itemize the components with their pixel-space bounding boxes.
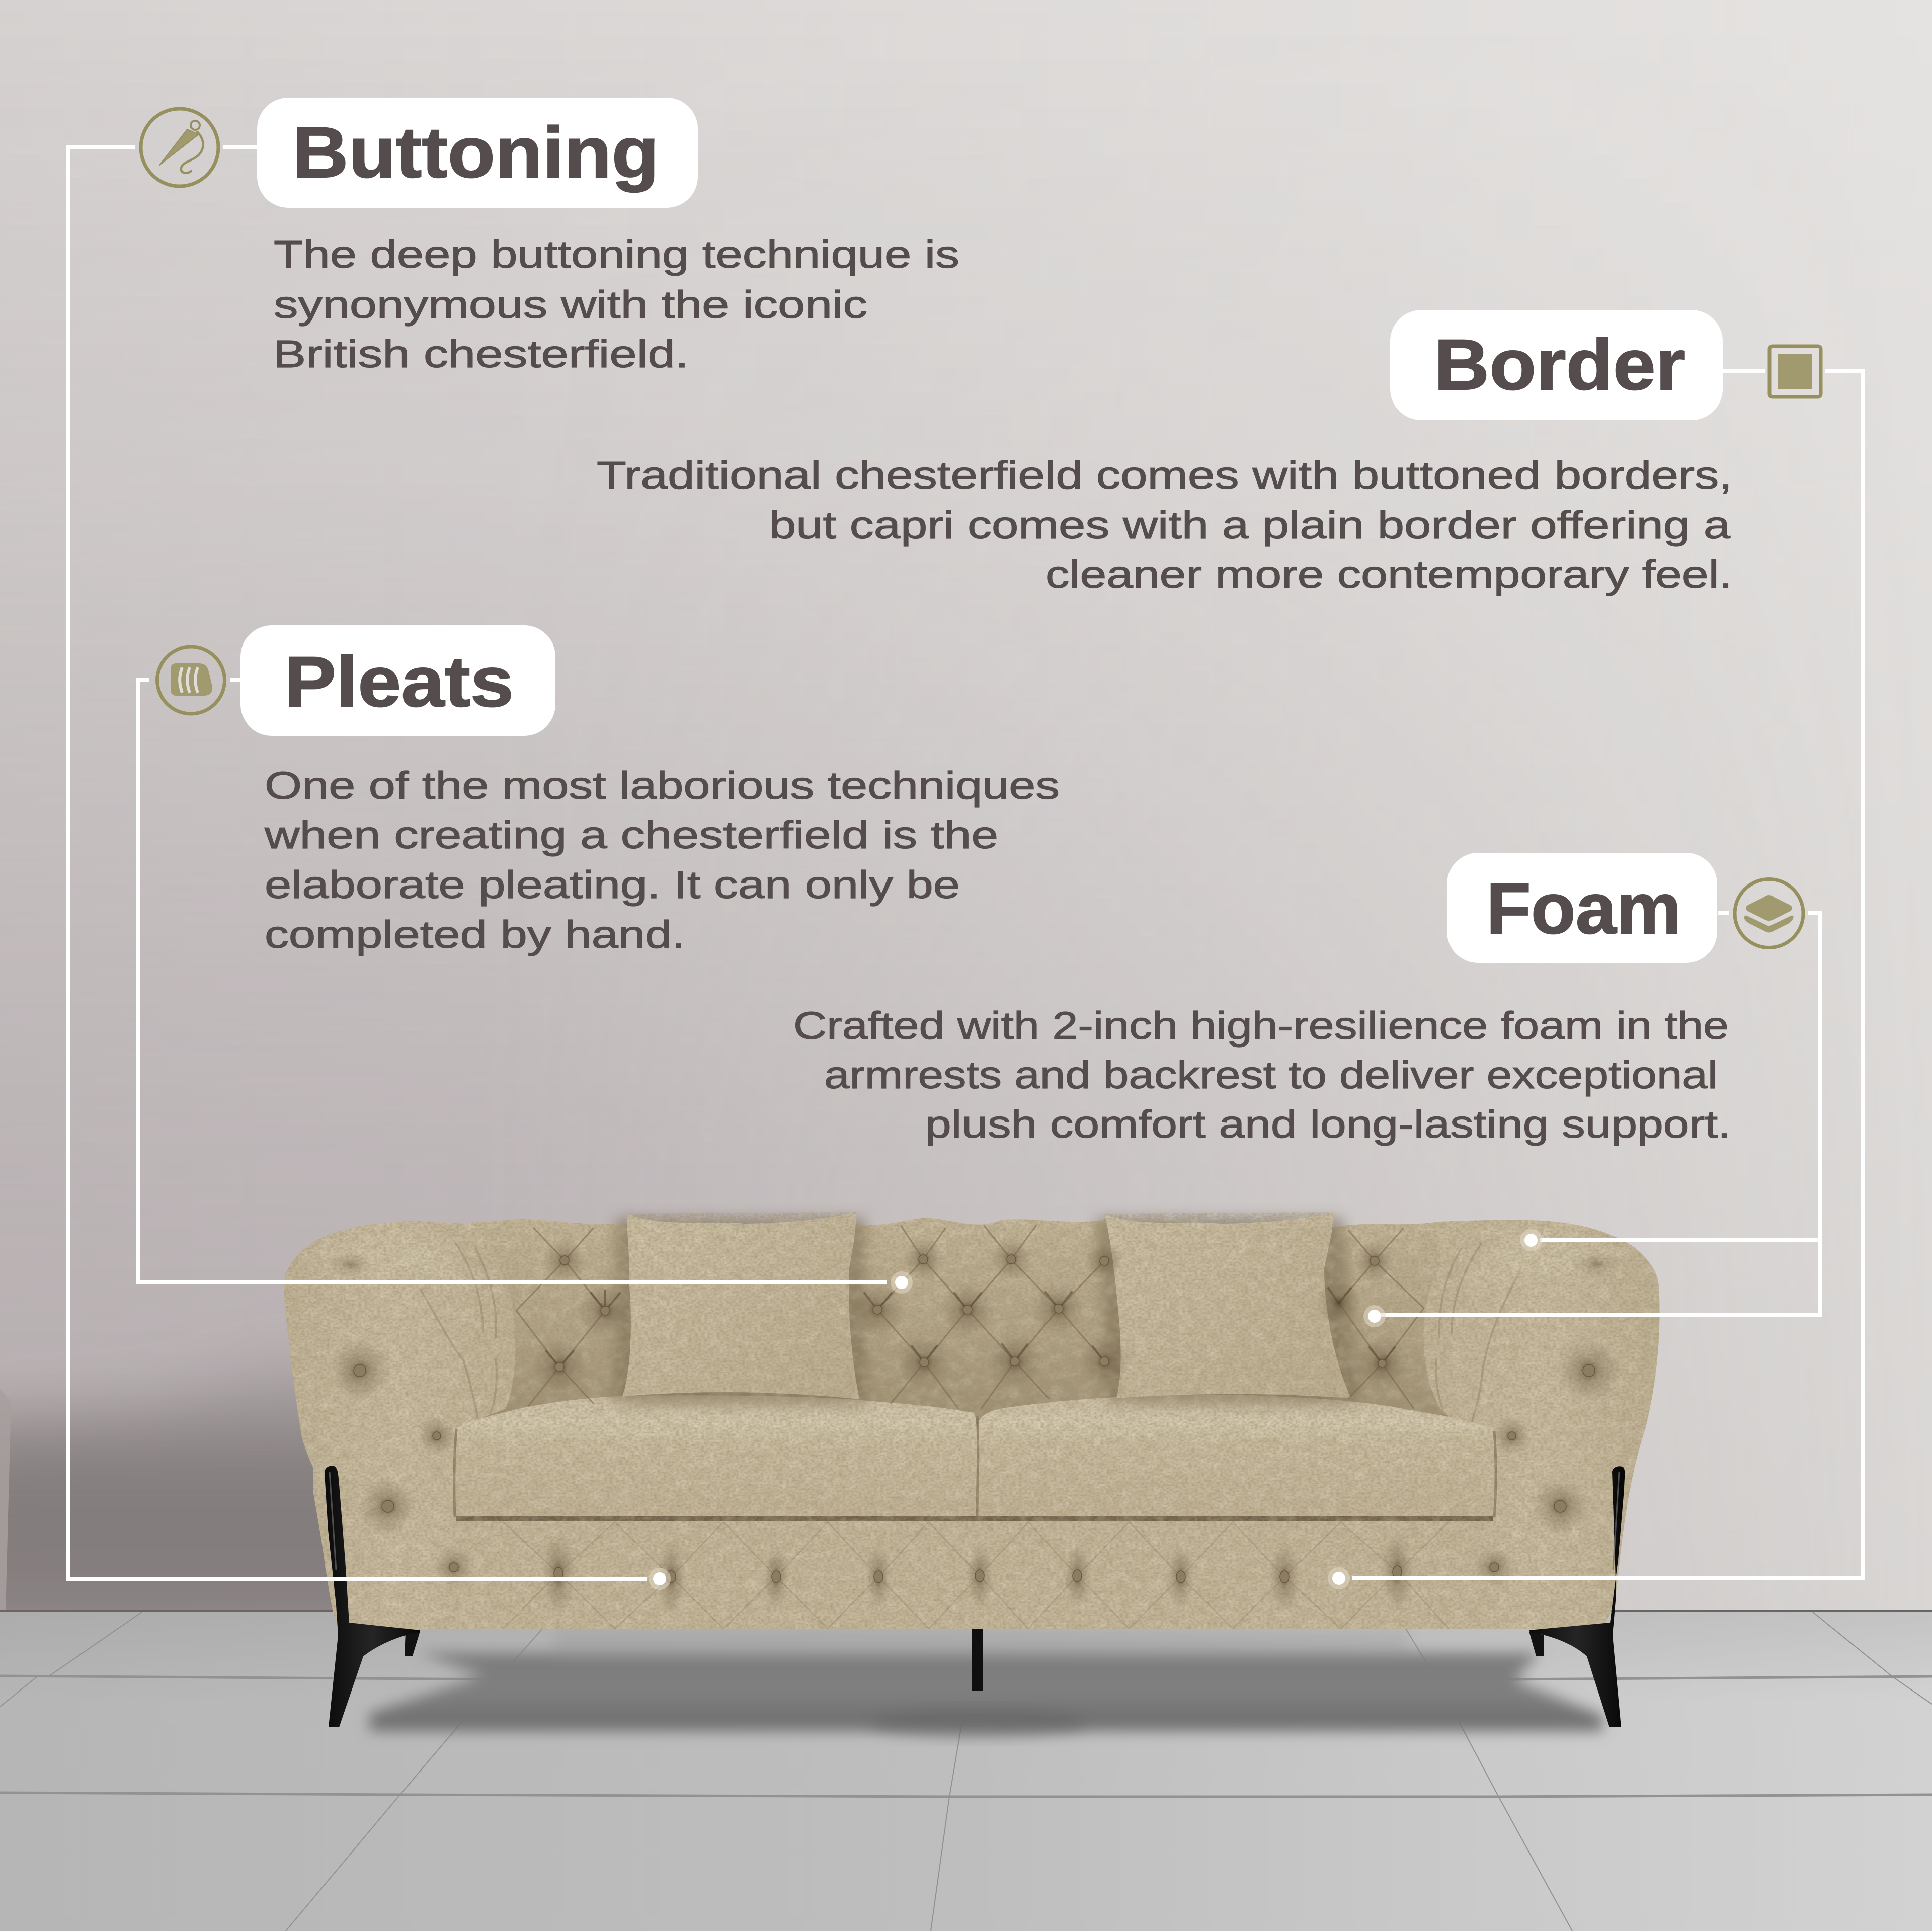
text: Buttoning description: The deep buttoning technique is bbox=[274, 233, 959, 276]
left arm bbox=[284, 1221, 515, 1629]
icon: needle and thread bbox=[141, 109, 218, 186]
heading: Foam bbox=[1447, 853, 1717, 963]
text: Border description: cleaner more contemporary feel. bbox=[1045, 553, 1732, 596]
right front leg bbox=[1529, 1466, 1625, 1727]
text: Pleats description: elaborate pleating. It can only be bbox=[265, 863, 960, 907]
text: Buttoning description bbox=[273, 233, 959, 376]
left seat cushion bbox=[454, 1395, 977, 1517]
right seat cushion bbox=[978, 1395, 1495, 1517]
text: Border description: but capri comes with a plain border offering a bbox=[769, 504, 1730, 547]
icon: border square bbox=[1769, 346, 1821, 397]
text: Border description bbox=[597, 454, 1732, 596]
left pillow bbox=[622, 1212, 859, 1399]
lower front rail bbox=[454, 1517, 1495, 1629]
heading: Pleats bbox=[240, 625, 555, 736]
icon: pleats bbox=[157, 647, 224, 714]
heading: Border bbox=[1390, 310, 1723, 420]
tuft stitching bbox=[516, 1225, 1424, 1409]
floor tiles bbox=[0, 1611, 1932, 1931]
text: Pleats description bbox=[264, 764, 1060, 956]
fabric texture bbox=[277, 1208, 1670, 1635]
cushion edges bbox=[454, 1416, 1496, 1517]
heading: Buttoning: Buttoning bbox=[292, 113, 659, 193]
right arm bbox=[1424, 1221, 1660, 1629]
right pillow bbox=[1104, 1212, 1351, 1398]
heading: Pleats: Pleats bbox=[284, 642, 514, 722]
heading: Border: Border bbox=[1434, 325, 1685, 405]
arm roll folds bbox=[420, 1243, 1519, 1424]
sofa body silhouette bbox=[284, 1218, 1660, 1629]
heading: Buttoning bbox=[257, 98, 698, 208]
back legs and centre leg bbox=[405, 1625, 1544, 1691]
text: Foam description: armrests and backrest to deliver exceptional bbox=[824, 1054, 1718, 1097]
callout: Border leader line bbox=[1328, 371, 1863, 1589]
text: Pleats description: when creating a chesterfield is the bbox=[264, 814, 998, 857]
text: Pleats description: completed by hand. bbox=[265, 913, 685, 956]
text: Buttoning description: synonymous with the iconic bbox=[274, 283, 867, 327]
heading: Foam: Foam bbox=[1486, 869, 1681, 949]
text: Foam description: plush comfort and long-lasting support. bbox=[925, 1103, 1731, 1146]
left front leg bbox=[325, 1466, 420, 1727]
text: Pleats description: One of the most laborious techniques bbox=[265, 764, 1060, 808]
sofa bbox=[277, 1208, 1670, 1635]
piping bbox=[456, 1516, 1493, 1521]
tuft creases bbox=[546, 1288, 1395, 1367]
icon: foam layers bbox=[1735, 879, 1803, 948]
sofa floor shadow bbox=[370, 1630, 1603, 1737]
callout: Buttoning leader line bbox=[68, 147, 671, 1590]
text: Foam description: Crafted with 2-inch high-resilience foam in the bbox=[793, 1004, 1729, 1048]
callout: Pleats leader line bbox=[138, 680, 913, 1294]
buttons bbox=[354, 1255, 1595, 1583]
tufted back panel bbox=[483, 1218, 1449, 1429]
pillow shadows bbox=[614, 1218, 1358, 1404]
text: Buttoning description: British chesterfield. bbox=[273, 333, 689, 376]
text: Border description: Traditional chesterfield comes with buttoned borders, bbox=[597, 454, 1732, 497]
text: Foam description bbox=[793, 1004, 1731, 1146]
callout: Foam leader lines bbox=[1363, 913, 1820, 1327]
button dimples bbox=[326, 1238, 1621, 1616]
